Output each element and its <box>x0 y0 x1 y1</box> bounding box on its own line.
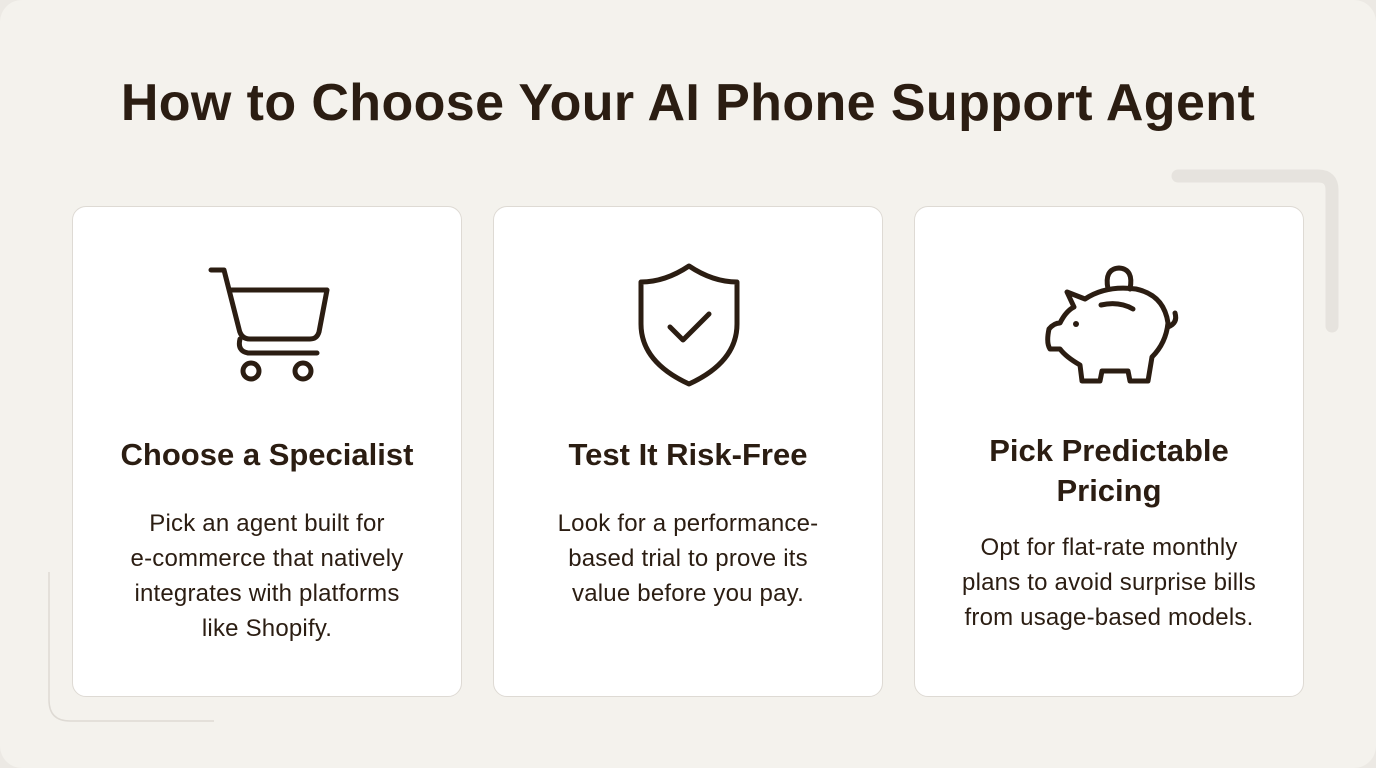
panel: test it risk-free <box>493 206 883 697</box>
text: value before you pay. <box>572 580 804 607</box>
text: e-commerce that natively <box>131 545 403 572</box>
text: based trial to prove its <box>568 545 808 572</box>
heading <box>989 433 1229 508</box>
heading: Pick Predictable <box>989 433 1229 468</box>
heading: Test It Risk-Free <box>569 437 807 472</box>
text: Pick an agent built for <box>149 510 385 537</box>
heading: Choose a Specialist <box>121 437 413 472</box>
icon: shopping cart <box>208 268 330 382</box>
panel: choose a specialist <box>72 206 462 697</box>
text: like Shopify. <box>202 615 332 642</box>
text: integrates with platforms <box>134 580 400 607</box>
text <box>131 510 404 642</box>
text: Opt for flat-rate monthly <box>980 534 1238 561</box>
text <box>558 510 818 607</box>
text: Look for a performance- <box>558 510 818 537</box>
text: plans to avoid surprise bills <box>962 569 1256 596</box>
text: from usage-based models. <box>965 604 1253 631</box>
heading: Pricing <box>1056 473 1162 508</box>
text <box>962 534 1256 631</box>
panel: pick predictable pricing <box>914 206 1304 697</box>
icon: piggy bank <box>1045 266 1178 384</box>
icon: shield check <box>638 264 740 386</box>
title: How to Choose Your AI Phone Support Agent <box>121 74 1255 132</box>
